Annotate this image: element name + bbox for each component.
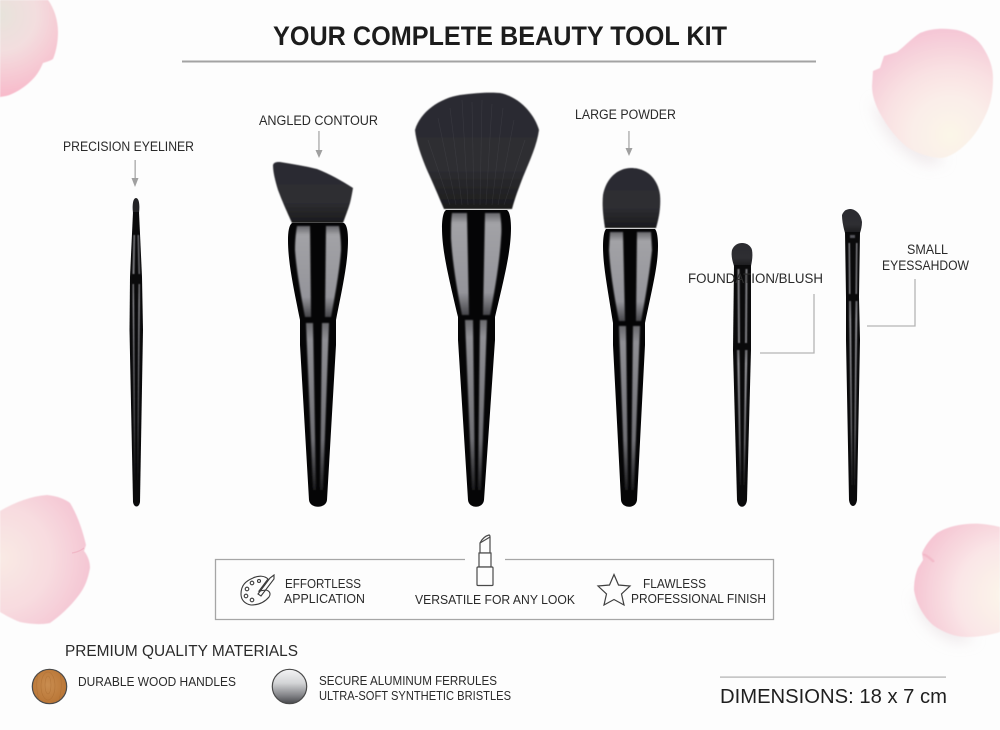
brush: small eyeshadow	[842, 209, 862, 506]
text: versatile: VERSATILE FOR ANY LOOK	[415, 592, 575, 607]
ferrule and handle	[845, 232, 860, 506]
arrow	[132, 160, 138, 187]
text: aluminum and bristles	[319, 674, 511, 703]
gloss highlights	[295, 226, 341, 490]
brush: precision eyeliner	[130, 198, 143, 506]
gloss highlights	[132, 235, 140, 480]
label: angled contour	[259, 113, 378, 158]
petal: top right	[872, 29, 993, 165]
ferrule and handle	[603, 229, 658, 507]
gloss highlights	[609, 232, 652, 490]
arrow	[626, 131, 632, 156]
brush: large powder	[415, 93, 539, 507]
dimensions: DIMENSIONS: 18 x 7 cm	[720, 686, 947, 708]
label: precision eyeliner: PRECISION EYELINER	[63, 139, 194, 154]
icon: wood swatch	[32, 669, 67, 704]
label: angled contour: ANGLED CONTOUR	[259, 113, 378, 128]
label: large powder: LARGE POWDER	[575, 107, 676, 122]
gloss highlights	[737, 269, 748, 485]
text: flawless professional finish: FLAWLESS	[643, 576, 706, 591]
brush: angled contour	[273, 162, 353, 507]
label: precision eyeliner	[63, 139, 194, 187]
text: aluminum and bristles: SECURE ALUMINUM FERRULES	[319, 674, 497, 688]
text: aluminum and bristles: ULTRA-SOFT SYNTHETIC BRISTLES	[319, 689, 511, 703]
bristles	[273, 162, 353, 223]
label: foundation/blush	[688, 271, 823, 353]
gloss highlights	[848, 235, 858, 485]
brush: dome powder	[603, 168, 660, 507]
brush: foundation/blush	[732, 243, 752, 507]
gloss highlights	[451, 213, 501, 490]
icon: aluminum swatch	[272, 669, 307, 704]
label: small eyeshadow: SMALL	[907, 242, 948, 257]
bristles	[133, 198, 139, 213]
panel border	[216, 560, 774, 620]
petal: bottom right	[914, 524, 1000, 642]
ferrule and handle	[130, 212, 143, 506]
text: flawless professional finish	[631, 576, 766, 606]
bristles	[732, 243, 752, 266]
icon: palette	[241, 575, 274, 605]
text: effortless application: APPLICATION	[284, 591, 365, 606]
text: flawless professional finish: PROFESSIONAL FINISH	[631, 591, 766, 606]
petal: bottom left	[0, 495, 90, 624]
arrow	[316, 131, 322, 158]
label: small eyeshadow: EYESSAHDOW	[882, 258, 969, 273]
label: small eyeshadow	[867, 242, 969, 326]
leader line	[760, 294, 814, 353]
icon: lipstick	[477, 535, 493, 586]
text: wood handles: DURABLE WOOD HANDLES	[78, 675, 236, 689]
text: effortless application: EFFORTLESS	[285, 576, 361, 591]
title: YOUR COMPLETE BEAUTY TOOL KIT	[273, 21, 727, 51]
bristles	[415, 93, 539, 209]
icon: star	[598, 574, 630, 605]
panel: benefits	[216, 535, 774, 620]
bristles	[603, 168, 660, 228]
ferrule and handle	[288, 223, 348, 507]
bristle texture	[428, 100, 525, 205]
label: large powder	[575, 107, 676, 156]
leader line	[867, 279, 915, 326]
petal: top left	[0, 0, 58, 97]
ferrule and handle	[442, 210, 511, 507]
heading: materials: PREMIUM QUALITY MATERIALS	[65, 643, 298, 660]
ferrule and handle	[733, 265, 751, 507]
text: effortless application	[284, 576, 365, 606]
label: foundation/blush: FOUNDATION/BLUSH	[688, 271, 823, 286]
bristles	[842, 209, 862, 233]
